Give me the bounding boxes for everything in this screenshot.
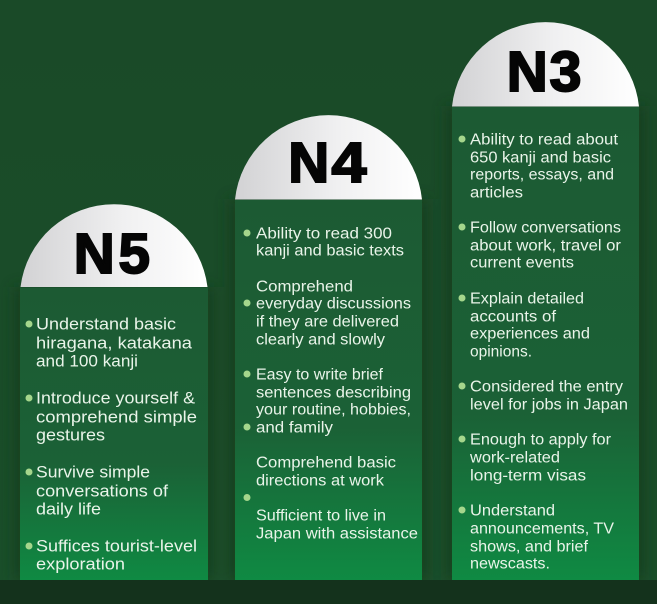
N5 heading: 5 [118,222,150,286]
N3 bullet: visas: work-related [469,450,560,466]
N4 dome header [235,115,422,200]
panel: N3 [452,22,639,580]
N4 bullet: discussions [244,278,411,348]
N4 bullet: family: and family [256,420,333,436]
N3 bullet: media: Understand [470,502,555,520]
N3 bullet: reading: Ability to read about [470,132,619,148]
N4 bullet: reading: kanji and basic texts [256,242,404,260]
N3 bullet: reading: reports, essays, and [470,166,614,184]
N5 bullet: introductions: Introduce yourself & [36,390,195,408]
N4 bullet: discussions: Comprehend [256,278,353,296]
N5 bullet: introductions [26,390,197,444]
N4 bullet: living in Japan: Japan with assistance [256,526,418,542]
N3 bullet: entry level [458,378,628,414]
N3 bullet: reading: 650 kanji and basic [470,150,611,166]
N4 bullet: living in Japan [244,494,418,542]
N3 bullet: media: shows, and brief [470,538,589,556]
N4 heading: 4 [332,131,367,195]
N3 bullet: explaining [458,290,590,360]
N5 bullet: conversations: conversations of [36,482,168,500]
N4 bullet: writing: your routine, hobbies, [256,402,411,418]
N4 heading: N [288,131,329,195]
N3 bullet: media: announcements, TV [470,520,615,538]
N3 heading: N [507,40,548,104]
N4 bullet: reading: Ability to read 300 [256,226,392,242]
N4 text: directions: Comprehend basic [256,454,396,472]
N3 heading: 3 [550,40,582,104]
N4 bullet: discussions: if they are delivered [256,314,399,330]
N3 bullet: entry level: level for jobs in Japan [470,396,628,414]
N5 heading [74,222,150,286]
N5 bullet: basic scripts: hiragana, katakana [36,334,193,352]
N4 bullet: living in Japan: Sufficient to live in [256,508,386,524]
N5 bullet: basic scripts [26,316,193,370]
N3 bullet: explaining: experiences and [470,326,590,342]
N4 body [235,200,422,580]
N5 dome header [20,204,208,287]
panel: N4 [235,115,422,580]
column shadows [14,106,645,580]
N3 body [452,107,639,580]
N3 bullet: entry level: Considered the entry [470,378,623,396]
N4 heading [288,131,367,195]
N3 bullet: reading [458,132,619,202]
N5 bullet: tourism [26,538,197,574]
N3 bullet: visas: Enough to apply for [470,432,611,448]
bottom band [0,580,657,604]
N4 bullet: writing: sentences describing [256,384,411,402]
N4 bullet: writing [244,366,411,418]
N3 bullet: explaining: opinions. [470,344,532,360]
N3 bullet: conversations [458,220,621,272]
N3 heading [507,40,582,104]
N3 bullet: media [458,502,615,572]
N5 bullet: basic scripts: and 100 kanji [36,352,138,370]
N5 bullet: conversations: daily life [36,500,101,518]
N4 text: directions: directions at work [256,472,384,490]
N4 text: directions [256,454,396,490]
N5 bullet: introductions: comprehend simple [36,408,197,426]
N5 bullet: tourism: Suffices tourist-level [36,538,197,556]
N5 bullet: conversations: Survive simple [36,464,150,482]
N3 bullet: explaining: accounts of [470,308,557,326]
N5 bullet: basic scripts: Understand basic [36,316,176,334]
N5 heading: N [74,222,115,286]
N3 bullet: conversations: Follow conversations [470,220,621,236]
N3 bullet: visas [458,432,611,484]
N4 bullet: discussions: everyday discussions [256,296,411,312]
N3 bullet: media: newscasts. [470,556,550,572]
N4 bullet: discussions: clearly and slowly [256,332,385,348]
N3 dome header [452,22,639,106]
N5 body [20,288,208,580]
N4 bullet: writing: Easy to write brief [256,366,384,384]
N5 bullet: conversations [26,464,168,518]
N3 bullet: conversations: about work, travel or [470,238,621,254]
N3 bullet: conversations: current events [470,254,574,272]
N4 bullet: reading [244,226,404,260]
N5 bullet: tourism: exploration [36,556,125,574]
N3 bullet: visas: long-term visas [470,468,586,484]
panel: N5 [20,204,208,580]
N5 bullet: introductions: gestures [36,426,105,444]
N3 bullet: explaining: Explain detailed [470,290,584,308]
N3 bullet: reading: articles [470,184,523,202]
